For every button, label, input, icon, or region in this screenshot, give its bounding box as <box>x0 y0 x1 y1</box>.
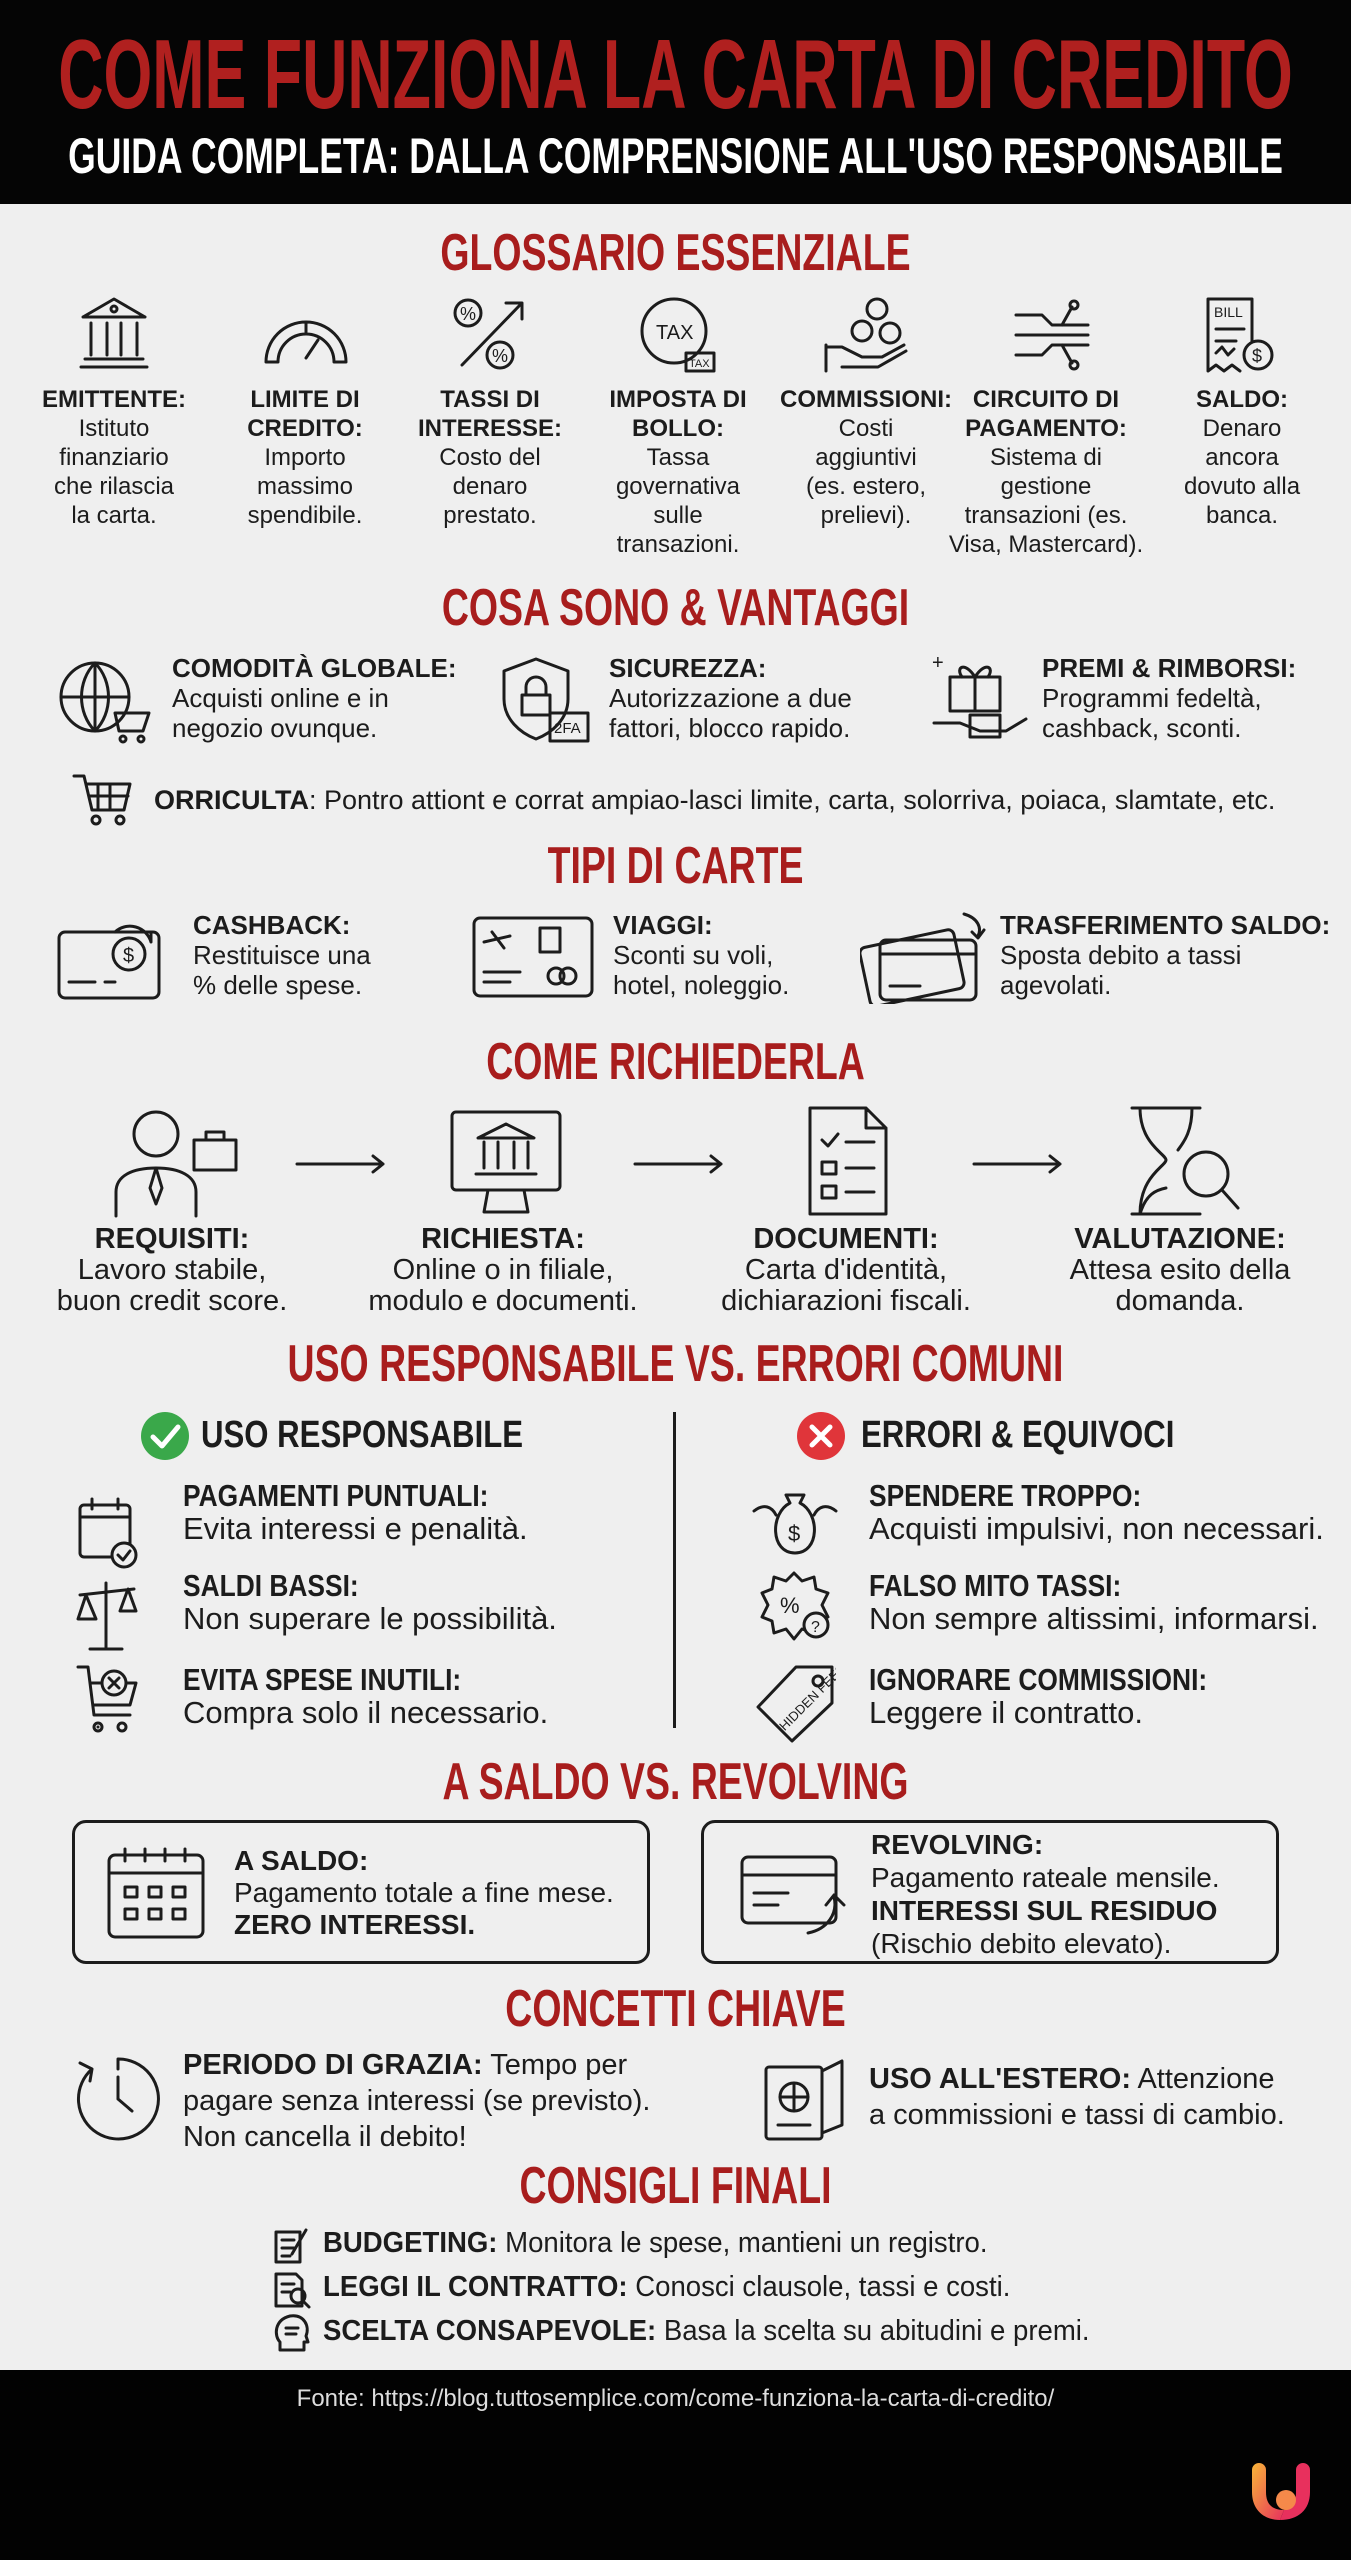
icon: document checklist <box>808 1106 888 1216</box>
panel: glossario: SALDO: <box>1196 386 1288 413</box>
text: trasferimento: Sposta debito a tassi <box>1000 940 1241 970</box>
text: documenti <box>721 1223 971 1317</box>
text: uso all'estero: USO ALL'ESTERO: Attenzione <box>869 2063 1274 2095</box>
divider <box>673 1412 676 1728</box>
panel: revolving <box>701 1820 1279 1964</box>
panel: glossario: Costi <box>839 415 893 442</box>
icon: passport <box>762 2055 848 2141</box>
text: cashback: Restituisce una <box>193 940 371 970</box>
icon: card arrow <box>738 1853 850 1939</box>
panel: consigli <box>260 2222 1120 2362</box>
text: a saldo <box>234 1845 614 1941</box>
item: evita spese: EVITA SPESE INUTILI: <box>183 1662 461 1697</box>
icon: check <box>141 1412 189 1460</box>
icon: cross <box>796 1411 846 1461</box>
text: valutazione <box>1070 1223 1290 1317</box>
panel: a saldo <box>72 1820 650 1964</box>
panel: glossario: sulle <box>653 502 703 529</box>
panel: uso responsabile <box>76 1412 557 1732</box>
text: comodita: negozio ovunque. <box>172 713 377 743</box>
panel: glossario: transazioni (es. <box>965 502 1127 529</box>
icon: shield 2fa <box>502 658 590 742</box>
text: glossario terms: che rilascia <box>54 473 174 500</box>
text: requisiti <box>57 1223 287 1317</box>
text: revolving <box>871 1828 1220 1960</box>
text: requisiti: REQUISITI: <box>95 1223 249 1255</box>
item: ignorare commissioni: Leggere il contratto. <box>869 1695 1143 1730</box>
panel: glossario: Denaro <box>1203 415 1281 442</box>
icon: transfer cards <box>860 912 986 1004</box>
item: pagamenti: PAGAMENTI PUNTUALI: <box>183 1478 488 1513</box>
text: cashback <box>193 910 371 1000</box>
panel: glossario: CIRCUITO DI <box>973 386 1119 413</box>
text: glossario terms: Istituto <box>79 415 149 442</box>
icon: bill: $ <box>1252 346 1262 366</box>
text: revolving: INTERESSI SUL RESIDUO <box>871 1895 1217 1926</box>
panel: glossario: Costo del <box>439 444 541 471</box>
text: viaggi: Sconti su voli, <box>613 940 773 970</box>
icon: cashback card: $ <box>123 945 134 967</box>
item: saldi bassi: Non superare le possibilità. <box>183 1601 557 1636</box>
item: falso mito: ? <box>811 1619 820 1636</box>
text: valutazione: VALUTAZIONE: <box>1074 1223 1286 1255</box>
icon: calendar <box>105 1845 207 1941</box>
text: valutazione: domanda. <box>1116 1285 1244 1317</box>
icon: tax: TAX <box>656 322 693 344</box>
text: sicurezza: fattori, blocco rapido. <box>609 713 850 743</box>
panel: glossario: COMMISSIONI: <box>780 386 952 413</box>
text: richiesta <box>368 1223 638 1317</box>
icon: logo <box>1250 2462 1314 2526</box>
heading: concetti chiave: CONCETTI CHIAVE <box>505 1980 846 2038</box>
item: scelta consapevole: SCELTA CONSAPEVOLE: Basa la scelta su abitudini e premi. <box>323 2315 1090 2347</box>
source text: Fonte: https://blog.tuttosemplice.com/come-funziona-la-carta-di-credito/ <box>297 2385 1054 2412</box>
icon: circuit <box>1014 300 1090 370</box>
panel: glossario: LIMITE DI <box>250 386 360 413</box>
text: a saldo: ZERO INTERESSI. <box>234 1909 475 1940</box>
title: COME FUNZIONA LA CARTA DI CREDITO <box>58 19 1293 129</box>
text: viaggi: VIAGGI: <box>613 910 713 940</box>
heading: uso responsabile vs errori: USO RESPONSABILE VS. ERRORI COMUNI <box>288 1335 1063 1393</box>
icon: coins hand <box>824 298 908 372</box>
text: richiesta: modulo e documenti. <box>368 1285 638 1317</box>
icon: percent arrow: % <box>460 304 476 324</box>
panel: steps <box>57 1106 1290 1317</box>
text: requisiti: Lavoro stabile, <box>78 1254 266 1286</box>
icon: bank <box>80 298 148 368</box>
item: spendere troppo: SPENDERE TROPPO: <box>869 1478 1141 1513</box>
panel: glossario: TASSI DI <box>440 386 540 413</box>
icon: gift <box>932 653 1028 738</box>
text: premi: PREMI & RIMBORSI: <box>1042 653 1296 683</box>
panel: glossario: prelievi). <box>821 502 911 529</box>
panel: tipi <box>58 910 1330 1004</box>
text: requisiti: buon credit score. <box>57 1285 287 1317</box>
text: documenti: dichiarazioni fiscali. <box>721 1285 971 1317</box>
text: cashback: % delle spese. <box>193 970 362 1000</box>
text: comodita: COMODITÀ GLOBALE: <box>172 653 457 683</box>
text: periodo di grazia: PERIODO DI GRAZIA: Tempo per <box>183 2049 627 2081</box>
text: trasferimento: agevolati. <box>1000 970 1111 1000</box>
item: evita spese: Compra solo il necessario. <box>183 1695 548 1730</box>
item: pagamenti <box>78 1478 528 1568</box>
heading: consigli finali: CONSIGLI FINALI <box>519 2157 831 2215</box>
item: evita spese <box>60 1663 640 1743</box>
panel: vantaggi <box>60 653 1296 826</box>
heading: glossario: GLOSSARIO ESSENZIALE <box>440 224 911 282</box>
text: premi <box>1042 653 1296 743</box>
text: sicurezza: SICUREZZA: <box>609 653 766 683</box>
text: valutazione: Attesa esito della <box>1070 1254 1290 1286</box>
text: uso all'estero <box>869 2061 1285 2133</box>
icon: hourglass magnifier <box>1130 1106 1240 1216</box>
item: scelta consapevole <box>260 2310 1120 2354</box>
icon: travel card <box>472 916 594 998</box>
panel: glossario: INTERESSE: <box>418 415 562 442</box>
item: budgeting: BUDGETING: Monitora le spese, mantieni un registro. <box>323 2227 988 2259</box>
panel: glossario: Tassa <box>647 444 709 471</box>
panel: glossario: spendibile. <box>248 502 362 529</box>
subtitle: GUIDA COMPLETA: DALLA COMPRENSIONE ALL'USO RESPONSABILE <box>68 128 1283 184</box>
text: periodo di grazia: pagare senza interessi (se previsto). <box>183 2085 650 2117</box>
panel: concetti <box>0 2045 1351 2155</box>
text: orricula: ORRICULTA: Pontro attiont e corrat ampiao-lasci limite, carta, solorriva, poiaca, slamtate, etc. <box>154 785 1275 815</box>
panel: glossario: banca. <box>1206 502 1278 529</box>
text: sicurezza: Autorizzazione a due <box>609 683 852 713</box>
panel: glossario: massimo <box>257 473 353 500</box>
text: documenti: Carta d'identità, <box>745 1254 947 1286</box>
item: spendere troppo <box>750 1479 1340 1559</box>
item: leggi contratto <box>260 2266 1120 2310</box>
icon: computer bank <box>450 1110 562 1214</box>
text: periodo di grazia <box>183 2047 650 2155</box>
panel: glossario: ancora <box>1205 444 1279 471</box>
text: richiesta: Online o in filiale, <box>393 1254 613 1286</box>
text: viaggi: hotel, noleggio. <box>613 970 789 1000</box>
panel: glossario <box>42 298 1300 558</box>
icon: clock <box>74 2053 164 2143</box>
icon: bill: BILL <box>1214 304 1243 320</box>
heading: cosa sono: COSA SONO & VANTAGGI <box>442 579 909 637</box>
icon: shield 2fa: 2FA <box>554 720 581 737</box>
arrow 3 <box>972 1154 1062 1174</box>
icon: tax: TAX <box>689 358 710 370</box>
icon: globe cart <box>60 661 150 744</box>
text: glossario terms: finanziario <box>59 444 169 471</box>
panel: glossario: aggiuntivi <box>815 444 917 471</box>
icon: cart <box>72 774 132 826</box>
text: revolving: REVOLVING: <box>871 1829 1043 1860</box>
panel: glossario: (es. estero, <box>806 473 926 500</box>
heading: tipi: TIPI DI CARTE <box>548 837 803 895</box>
arrow 1 <box>296 1154 385 1174</box>
text: glossario terms: la carta. <box>71 502 157 529</box>
text: glossario terms <box>42 386 186 529</box>
panel: glossario: transazioni. <box>617 531 739 558</box>
item: falso mito <box>750 1569 1340 1649</box>
item: ignorare commissioni: IGNORARE COMMISSIONI: <box>869 1662 1207 1697</box>
text: documenti: DOCUMENTI: <box>753 1223 939 1255</box>
text: a saldo: A SALDO: <box>234 1845 368 1876</box>
item: budgeting <box>260 2222 1120 2266</box>
item: saldi bassi: SALDI BASSI: <box>183 1568 359 1603</box>
panel: glossario: PAGAMENTO: <box>965 415 1127 442</box>
icon: person briefcase <box>114 1110 238 1218</box>
text: revolving: Pagamento rateale mensile. <box>871 1862 1220 1893</box>
item: leggi contratto: LEGGI IL CONTRATTO: Conosci clausole, tassi e costi. <box>323 2271 1010 2303</box>
icon: gauge <box>264 320 348 364</box>
text: glossario terms: EMITTENTE: <box>42 386 186 413</box>
panel: glossario: Sistema di <box>990 444 1102 471</box>
panel: glossario: IMPOSTA DI <box>609 386 747 413</box>
icon: percent arrow: % <box>492 346 508 366</box>
text: comodita <box>172 653 457 743</box>
item: ignorare commissioni <box>750 1663 1340 1743</box>
panel: errori <box>740 1405 1340 1735</box>
text: premi: Programmi fedeltà, <box>1042 683 1262 713</box>
item: falso mito: FALSO MITO TASSI: <box>869 1568 1121 1603</box>
icon: cashback card <box>58 924 160 1000</box>
text: viaggi <box>613 910 789 1000</box>
text: richiesta: RICHIESTA: <box>421 1223 585 1255</box>
panel: glossario: Importo <box>264 444 346 471</box>
panel: glossario: gestione <box>1001 473 1091 500</box>
subheading: errori: ERRORI & EQUIVOCI <box>861 1414 1174 1456</box>
item: spendere troppo: $ <box>788 1521 800 1546</box>
panel: glossario: CREDITO: <box>247 415 363 442</box>
text: comodita: Acquisti online e in <box>172 683 389 713</box>
panel: glossario: dovuto alla <box>1184 473 1300 500</box>
text: revolving: (Rischio debito elevato). <box>871 1928 1171 1959</box>
item: saldi bassi <box>60 1569 640 1649</box>
item: pagamenti: Evita interessi e penalità. <box>183 1511 528 1546</box>
panel: glossario: denaro <box>453 473 527 500</box>
text: trasferimento: TRASFERIMENTO SALDO: <box>1000 910 1330 940</box>
icon: tax <box>640 298 716 372</box>
panel: glossario: governativa <box>616 473 740 500</box>
panel: glossario: BOLLO: <box>632 415 724 442</box>
footer <box>0 2370 1351 2560</box>
icon: bill <box>1206 298 1274 373</box>
text: uso all'estero: a commissioni e tassi di cambio. <box>869 2099 1285 2131</box>
heading: come richiederla: COME RICHIEDERLA <box>486 1033 865 1091</box>
text: periodo di grazia: Non cancella il debito! <box>183 2121 467 2153</box>
arrow 2 <box>634 1154 723 1174</box>
item: spendere troppo: Acquisti impulsivi, non necessari. <box>869 1511 1324 1546</box>
subheading: uso responsabile: USO RESPONSABILE <box>201 1414 523 1456</box>
text: a saldo: Pagamento totale a fine mese. <box>234 1877 614 1908</box>
panel: glossario: prestato. <box>443 502 537 529</box>
text: trasferimento <box>1000 910 1330 1000</box>
item: falso mito: % <box>780 1593 800 1618</box>
text: sicurezza <box>609 653 852 743</box>
panel: glossario: Visa, Mastercard). <box>949 531 1143 558</box>
item: falso mito: Non sempre altissimi, informarsi. <box>869 1601 1319 1636</box>
heading: a saldo vs revolving: A SALDO VS. REVOLVING <box>443 1753 908 1811</box>
icon: percent arrow <box>454 298 524 370</box>
text: cashback: CASHBACK: <box>193 910 350 940</box>
header <box>0 0 1351 204</box>
text: premi: cashback, sconti. <box>1042 713 1241 743</box>
